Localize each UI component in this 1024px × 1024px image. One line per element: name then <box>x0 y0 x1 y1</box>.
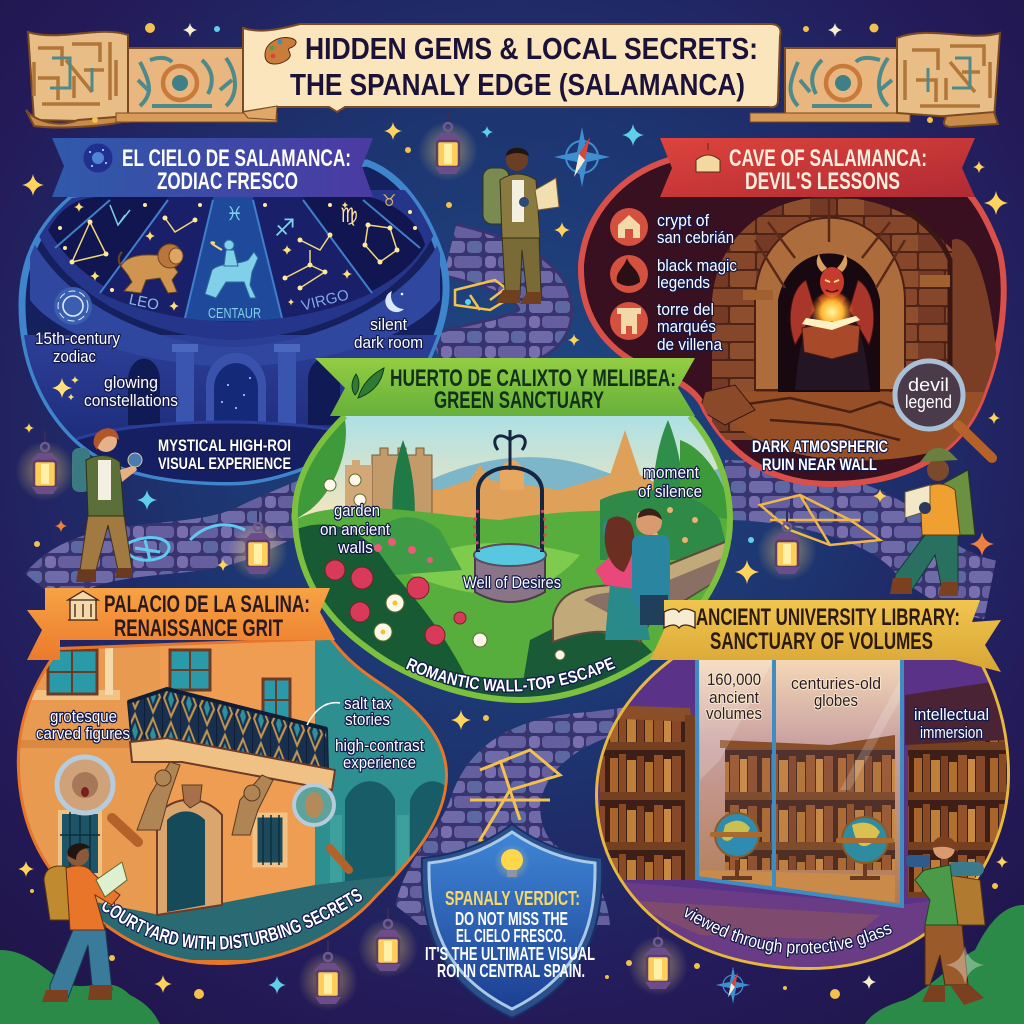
icon: sparkles <box>52 376 79 400</box>
library labels: 160,000 <box>707 670 761 689</box>
verdict text: SPANALY VERDICT: <box>445 888 580 910</box>
verdict text: EL CIELO FRESCO. <box>456 926 566 946</box>
library labels: ancient <box>709 688 759 707</box>
banner: huerto: GREEN SANCTUARY <box>434 387 604 414</box>
fresco labels: zodiac <box>53 347 96 366</box>
panel outline <box>295 416 730 700</box>
couple <box>595 508 670 640</box>
zodiac glyphs: ♍ <box>340 203 358 227</box>
banner: zodiac fresco: EL CIELO DE SALAMANCA: <box>122 145 351 172</box>
fresco labels <box>35 286 423 473</box>
cave list labels: san cebrián <box>657 228 734 247</box>
fresco labels: VISUAL EXPERIENCE <box>158 454 291 473</box>
garden labels: ROMANTIC WALL-TOP ESCAPE <box>404 656 617 693</box>
garden labels: on ancient <box>320 520 390 539</box>
fresco labels: silent <box>370 315 407 334</box>
title text <box>290 31 758 102</box>
hiker: bottom right with binoculars <box>906 836 985 1005</box>
palace labels: grotesque <box>50 707 117 726</box>
palace labels: stories <box>345 710 390 729</box>
magnifier: grotesque face <box>57 757 138 842</box>
banner: cave <box>660 138 975 197</box>
palace labels: salt tax <box>344 694 392 713</box>
zodiac glyphs: ♐ <box>274 214 296 242</box>
well <box>474 430 546 602</box>
wall-top ribbon <box>405 668 615 692</box>
icon: 15th century zodiac <box>54 287 92 325</box>
cave list labels: torre del <box>657 300 714 319</box>
cave scene <box>700 197 1000 460</box>
garden labels: Well of Desires <box>463 573 561 592</box>
fresco labels: LEO <box>127 291 160 314</box>
banner: palacio <box>27 588 335 660</box>
palace scene <box>20 640 455 960</box>
hiker: right with camera <box>890 448 975 596</box>
palace labels <box>36 694 426 951</box>
garden scene <box>290 410 736 705</box>
banner: zodiac fresco <box>52 138 373 197</box>
verdict text: ROI IN CENTRAL SPAIN. <box>437 961 585 981</box>
garden labels: walls <box>337 538 373 557</box>
main parchment <box>243 24 781 112</box>
panel body <box>22 163 446 482</box>
title scroll banner <box>26 24 1000 127</box>
zodiac glyphs: ♓ <box>226 203 243 225</box>
verdict text: DO NOT MISS THE <box>455 909 568 929</box>
zodiac glyphs <box>229 194 395 236</box>
palace labels: experience <box>343 753 416 772</box>
verdict text <box>425 888 595 981</box>
hiker: top map reader <box>483 148 559 304</box>
banner: palacio: RENAISSANCE GRIT <box>114 615 283 642</box>
panel: zodiac fresco <box>20 138 450 494</box>
fresco labels: 15th-century <box>35 329 120 348</box>
bushes: bottom left <box>0 950 160 1024</box>
balcony <box>128 689 335 790</box>
fresco scene <box>20 190 450 494</box>
library labels: volumes <box>706 704 762 723</box>
right ornamental scrolls <box>750 33 1000 127</box>
centaur <box>205 240 258 298</box>
panel body <box>20 640 445 962</box>
library labels <box>684 670 990 958</box>
lanterns <box>15 111 817 1011</box>
panel body <box>581 160 1004 484</box>
cave list labels: crypt of <box>657 211 709 230</box>
stone wall <box>553 540 730 642</box>
icons: list circles <box>610 208 648 340</box>
panel: ancient university library <box>595 600 1010 970</box>
panel: cave of salamanca <box>581 138 1004 484</box>
banner: huerto <box>315 358 695 416</box>
fresco labels: dark room <box>354 333 423 352</box>
garden labels: moment <box>643 463 699 482</box>
garden labels: garden <box>334 501 380 520</box>
library scene <box>595 650 1015 970</box>
library labels: centuries-old <box>791 674 881 693</box>
library labels: immersion <box>920 723 983 742</box>
fresco labels: CENTAUR <box>208 305 261 322</box>
banner: library <box>650 600 1001 672</box>
icon: light bulb <box>494 844 530 880</box>
icon: compass bottom <box>716 966 750 1004</box>
fresco labels: MYSTICAL HIGH-ROI <box>158 436 291 455</box>
palace labels: high-contrast <box>335 736 424 755</box>
library labels: viewed through protective glass <box>684 906 893 958</box>
verdict shield <box>422 824 602 1018</box>
banner: palacio: PALACIO DE LA SALINA: <box>104 591 310 618</box>
magnifier: devil legend <box>895 361 992 458</box>
panel: huerto garden <box>292 358 733 703</box>
salt tax pointer <box>307 703 340 725</box>
carved atlantes <box>137 762 273 835</box>
cave list labels: RUIN NEAR WALL <box>762 455 877 474</box>
fresco labels: constellations <box>84 391 178 410</box>
title text: HIDDEN GEMS & LOCAL SECRETS: <box>305 31 758 66</box>
devil <box>790 254 874 390</box>
banner: zodiac fresco: ZODIAC FRESCO <box>157 168 298 195</box>
fresco labels: VIRGO <box>300 286 351 315</box>
cave list labels: DARK ATMOSPHERIC <box>752 437 888 456</box>
garden labels: of silence <box>638 482 702 501</box>
arcade wall <box>128 344 340 428</box>
roses and flowers <box>324 474 565 660</box>
cave list labels: marqués <box>657 317 716 336</box>
palace labels: carved figures <box>36 724 130 743</box>
cave list labels: de villena <box>657 335 722 354</box>
windows <box>48 650 290 723</box>
cobblestone winding paths <box>45 250 990 925</box>
banner: huerto: HUERTO DE CALIXTO Y MELIBEA: <box>390 365 676 392</box>
ground <box>98 876 394 960</box>
icon: compass top <box>554 127 610 187</box>
left ornamental scrolls <box>26 32 277 127</box>
library labels: globes <box>814 691 858 710</box>
panel body <box>598 655 1007 967</box>
hiker: left with compass <box>72 428 142 582</box>
cave list labels: legends <box>657 273 710 292</box>
magnifier: devil legend: legend <box>905 392 952 412</box>
verdict text: IT'S THE ULTIMATE VISUAL <box>425 944 595 964</box>
door arch <box>157 800 222 915</box>
fresco labels: glowing <box>104 373 158 392</box>
magnifier: carved face <box>294 785 349 870</box>
banner: cave: CAVE OF SALAMANCA: <box>729 145 927 172</box>
zodiac glyphs: ♉ <box>382 191 396 210</box>
palace labels: COURTYARD WITH DISTURBING SECRETS <box>101 888 364 951</box>
glass window <box>697 657 902 906</box>
low plants <box>524 629 652 678</box>
panel: palacio de la salina <box>16 588 448 965</box>
garden labels <box>320 463 702 693</box>
glowing book <box>802 290 860 359</box>
bushes: bottom right <box>865 905 1024 1024</box>
banner: library: SANCTUARY OF VOLUMES <box>710 628 933 655</box>
icon: palette <box>265 38 296 64</box>
globes <box>710 813 894 878</box>
cave list labels: black magic <box>657 256 737 275</box>
lion <box>119 244 183 293</box>
floor <box>75 420 330 482</box>
icon: moon <box>385 291 404 312</box>
cave list labels <box>657 211 888 474</box>
magnifier: devil legend: devil <box>908 375 949 395</box>
library labels: intellectual <box>914 705 989 724</box>
banner: cave: DEVIL'S LESSONS <box>745 168 900 195</box>
hiker: bottom left with map <box>42 843 127 1002</box>
title text: THE SPANALY EDGE (SALAMANCA) <box>290 67 745 102</box>
